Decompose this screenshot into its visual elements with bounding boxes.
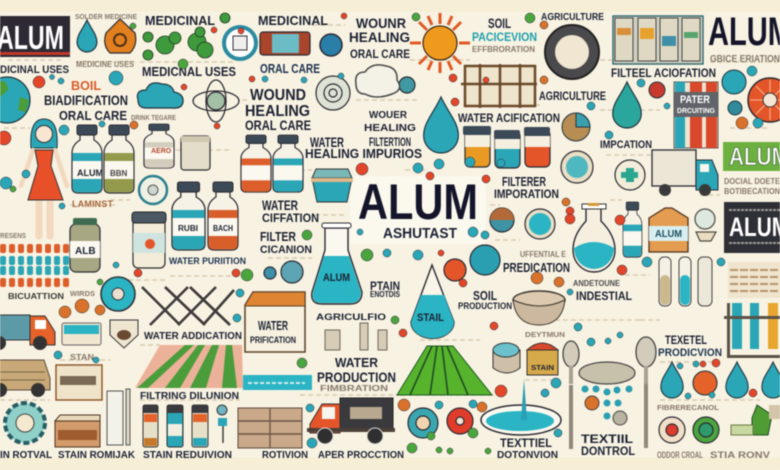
text labels: wound healing: ORAL CARE <box>245 117 311 133</box>
jar: amber <box>463 126 491 167</box>
text labels: medicinal uses: SOLDER MEDICINE <box>75 14 137 21</box>
jar: olive ALUM <box>70 218 100 272</box>
text labels: water purification: IMPORATION <box>494 187 559 201</box>
bottles: lower left trio <box>143 405 208 447</box>
text labels: bottom row: STAN <box>70 353 94 362</box>
bottle: grey jar: AERO <box>151 148 172 155</box>
icon: water purification box: WATER <box>258 318 288 333</box>
icon: green plants <box>143 13 230 60</box>
icon: STAIL drop: STAIL <box>417 312 444 324</box>
text labels: medicinal uses: MEDICINAL <box>258 13 328 28</box>
icon: tan truck left <box>0 360 50 397</box>
icon: STAIN can <box>527 343 558 375</box>
icon: cylinder tank <box>493 343 520 373</box>
icon: pin marker <box>217 405 227 443</box>
text labels: water purification: WATER ADDICATION <box>144 330 242 342</box>
icon: test tubes <box>659 257 712 306</box>
panel: dark ALUM banner right <box>724 202 780 253</box>
text labels: stain, soil, industrial: INDESTIAL <box>576 289 632 303</box>
panel: PATER DRCUITING test tubes: PATER <box>680 94 710 106</box>
jar: cream with red mark <box>132 212 166 268</box>
text labels: water purification: CICANION <box>260 244 312 256</box>
panel: PATER DRCUITING test tubes: DRCUITING <box>677 106 715 115</box>
panel: teal band <box>243 375 312 390</box>
bottle: teal slim <box>623 202 642 257</box>
icon: red tablet <box>260 32 310 55</box>
jar: red <box>524 127 550 167</box>
text labels: soil and agriculture: AGRICULTURE <box>541 11 604 23</box>
text labels: wound healing: HEALING <box>364 123 416 134</box>
title: central ALUM heading: ASHUTAST <box>383 225 457 242</box>
text labels: stain, soil, industrial: UFFENTIAL E <box>520 250 567 259</box>
icon: document blocks right <box>728 262 780 298</box>
text labels: stain, soil, industrial: ENOTDIS <box>370 290 401 299</box>
text labels: bottom row: PRODICVION <box>658 347 722 359</box>
icon: round flask <box>573 203 615 272</box>
icon: ALUM flask <box>312 223 362 304</box>
icon: teal badge lower left <box>101 277 135 311</box>
text labels: stain, soil, industrial: PRODUCTION <box>458 301 512 311</box>
icon: plate with falling drops <box>579 362 635 425</box>
bottles: upper row <box>72 124 550 193</box>
text labels: wound healing: WOUER <box>369 110 408 121</box>
text labels: stain, soil, industrial: AGRICULFIO <box>316 312 386 323</box>
text labels: soil and agriculture: PACICEVION <box>472 30 537 44</box>
text labels: soil and agriculture: AGRICULTURE <box>539 89 606 103</box>
bottle: orange <box>241 135 271 192</box>
bottle: olive: BBN <box>110 169 128 178</box>
text labels: stain, soil, industrial: SOIL <box>473 288 497 303</box>
icon: lab clock stand <box>695 209 716 241</box>
icon: paper document and stick <box>107 389 130 445</box>
text labels: wound healing <box>245 15 422 161</box>
icon: water pool fountain <box>481 379 561 435</box>
icon: patterned discs bottom right <box>659 417 719 443</box>
jar: beige <box>181 136 210 170</box>
text labels: purification and oral care: BOIL <box>71 78 101 93</box>
bottle: teal large <box>172 182 205 250</box>
bottle: teal <box>72 125 103 193</box>
text labels: medicinal uses: DICINAL USES <box>0 64 69 76</box>
icon: teal drop top left <box>77 20 97 52</box>
icon: green leaf plant <box>731 405 780 435</box>
icon: wooden box <box>55 415 100 447</box>
text labels: soil and agriculture: FILTEEL ACIOFATION <box>611 66 716 80</box>
icon: ring with cream centre <box>545 25 599 79</box>
panel: PATER DRCUITING test tubes <box>674 82 718 148</box>
text labels: bottom row: APER PROCCTION <box>318 449 404 461</box>
icon: large drop upper right <box>613 82 641 128</box>
icon: test tube rack <box>724 303 780 358</box>
icon: discs by truck <box>408 408 473 438</box>
icon: delivery truck centre <box>307 398 395 444</box>
text labels: wound healing: ORAL CARE <box>260 61 320 76</box>
bottle: orange large <box>208 182 238 250</box>
text labels: bottom row: STAIN ROMIJAK <box>58 449 135 461</box>
text labels: wound healing: ORAL CARE <box>350 47 410 61</box>
text labels: bottom row: ROTIVION <box>262 450 308 461</box>
text labels: soil and agriculture: IMPCATION <box>600 139 652 151</box>
text labels: water purification: BICUATTION <box>8 292 64 301</box>
panel: green ALUM banner <box>723 142 780 196</box>
text labels: stain, soil, industrial: FIMBRATION <box>320 384 388 393</box>
icon: pill grid <box>0 244 69 287</box>
text labels: purification and oral care: DRINK TEGARE <box>131 115 176 122</box>
icon: sun <box>410 13 470 73</box>
icon: water purification box: PRIFICATION <box>250 335 296 345</box>
bottle: orange large: BACH <box>213 224 233 233</box>
text labels: water purification: FILTER <box>260 229 296 244</box>
text labels: wound healing: HEALING <box>349 29 410 45</box>
bottle: teal large: RUBI <box>178 224 198 233</box>
icon: STAIN can: STAIN <box>531 363 554 372</box>
icon: gear <box>5 403 45 443</box>
text labels: soil and agriculture: EFFBRORATION <box>472 45 535 54</box>
dress <box>28 150 63 200</box>
bottles: lower row <box>70 182 642 272</box>
icon: water purification box <box>245 292 305 352</box>
text labels: water purification: FILTRING DILUNION <box>140 391 239 402</box>
arms <box>21 150 67 186</box>
icon: bowl <box>311 169 353 202</box>
text labels: stain, soil, industrial: PREDICATION <box>503 260 570 275</box>
bottle: teal small <box>273 135 303 192</box>
icon: blue circle <box>320 34 342 56</box>
text labels: soil and agriculture: SOIL <box>488 15 511 31</box>
text labels: medicinal uses: MEDICNAL USES <box>142 64 236 79</box>
icon: round badges middle right <box>525 151 645 239</box>
text labels: water purification <box>8 174 559 402</box>
icon: ring badge <box>139 176 167 204</box>
text labels: wound healing: HEALING <box>245 103 310 120</box>
icon: green field centre <box>397 346 492 395</box>
icon: orange truck left <box>0 315 55 350</box>
text labels: bottom row: ODDOR CROAL <box>657 450 703 460</box>
icon: bowl of alum <box>513 291 565 325</box>
text labels: bottom row: DOTONVION <box>497 449 558 461</box>
text labels: medicinal uses: WIRDS <box>70 291 95 298</box>
chart: round discs near centre <box>264 76 514 283</box>
icon: ALUM tin <box>649 208 688 252</box>
text labels: purification and oral care: ORAL CARE <box>59 108 127 123</box>
text labels: stain, soil, industrial: DEYTMUN <box>525 330 565 339</box>
bottle: grey jar <box>144 124 174 168</box>
icon: orange wheel <box>748 78 780 122</box>
icon: globe <box>0 77 30 123</box>
text labels: stain, soil, industrial: WATER <box>335 355 379 370</box>
text labels: water purification: CIFFATION <box>262 211 319 225</box>
text labels: wound healing: HEALING IMPURIOS <box>305 146 422 161</box>
text labels: bottom row: TEXTIIL <box>581 432 633 446</box>
bottle: olive <box>104 125 134 193</box>
text labels: bottom row: IN ROTVAL <box>0 449 53 461</box>
icon: large drop upper centre <box>424 97 458 153</box>
panel: tan label <box>56 365 102 400</box>
icon: wooden shelf <box>461 64 537 108</box>
text labels: purification and oral care: BIADIFICATION <box>44 92 128 108</box>
text labels: wound healing: FILTERTION <box>369 135 411 149</box>
text labels: water purification: WATER PURIITION <box>169 256 246 267</box>
jar: olive ALUM: ALB <box>75 246 96 257</box>
hair and head <box>31 119 57 148</box>
text labels: bottom row: TEXETEL <box>665 333 707 347</box>
icon: white rock cluster <box>356 65 400 97</box>
title: central ALUM heading: ALUM <box>358 174 478 230</box>
text labels: medicinal uses: LAMINST <box>72 199 114 209</box>
panel: teal card <box>62 323 101 345</box>
text labels: medicinal uses: RESENS <box>0 233 26 240</box>
text labels: soil and agriculture <box>458 11 716 151</box>
text labels: purification and oral care <box>44 78 176 123</box>
text labels: bottom row: STAIN REDUIVION <box>143 449 232 461</box>
text labels: bottom row: DONTROL <box>581 444 635 458</box>
icon: blue ring <box>224 27 256 59</box>
text labels: water purification: WATER <box>262 197 298 213</box>
jar: teal <box>494 130 520 168</box>
bottle: teal: ALUM <box>77 168 103 178</box>
icon: building sketch <box>325 323 387 350</box>
icon: ALUM tin: ALUM <box>655 229 682 240</box>
text labels: medicinal uses <box>0 13 328 298</box>
text labels: stain, soil, industrial: PRODUCTION <box>317 369 396 385</box>
text labels: wound healing: WOUNR <box>356 15 406 31</box>
text labels: bottom row: TEXTTIEL <box>500 436 552 450</box>
panel: wooden stack <box>238 408 302 448</box>
icon: shield <box>110 320 138 348</box>
text labels: stain, soil, industrial: ANDETOUNE <box>573 278 620 288</box>
text labels: stain, soil, industrial: PTAIN <box>370 279 400 293</box>
icon: STAIL drop <box>411 265 454 338</box>
icon: white delivery truck <box>652 150 718 196</box>
figure: woman in red dress <box>21 119 67 236</box>
icon: row of drops <box>661 362 780 398</box>
legs <box>39 198 50 236</box>
icon: ALUM flask: ALUM <box>323 272 350 284</box>
icon: orange badge <box>105 19 136 53</box>
icon: row of four books <box>613 16 703 64</box>
text labels: bottom row: FIBRERECANOL <box>657 403 719 412</box>
icon: teal badges right <box>562 70 746 141</box>
text labels: soil and agriculture: WATER ACIFICATION <box>458 111 560 125</box>
text labels: medicinal uses: MEDICINE USES <box>76 60 135 69</box>
icon: teal cloud <box>137 83 183 108</box>
title: central ALUM heading <box>350 174 486 244</box>
icon: orange and green farm rows <box>135 345 243 388</box>
text labels: bottom row <box>0 333 770 461</box>
text labels: water purification: FILTERER <box>502 174 546 189</box>
text labels: wound healing: WATER <box>310 134 344 150</box>
text labels: bottom row: STIA RONV <box>710 450 770 460</box>
text labels: stain, soil, industrial <box>316 250 632 393</box>
text labels: wound healing: WOUND <box>250 87 306 104</box>
text labels: medicinal uses: MEDICINAL <box>145 13 215 28</box>
icon: spoons <box>563 337 656 449</box>
icon: crossed lattice <box>142 287 234 325</box>
icon: atom <box>193 80 239 122</box>
